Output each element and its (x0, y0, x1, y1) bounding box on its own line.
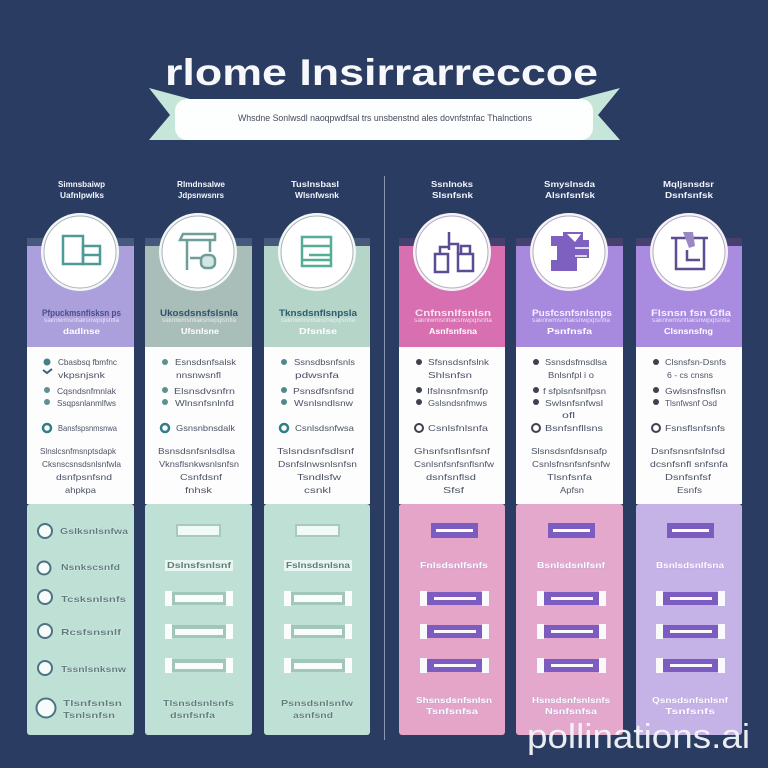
column 5 list: Swlsnfsnfwsl (545, 398, 603, 408)
icon: column 5 (530, 213, 608, 291)
column 6 list: Tlsnfwsnf Osd (665, 398, 717, 408)
column 5 lower bars: Nsnfsnfsa (545, 706, 597, 716)
column 2 heading (177, 179, 225, 200)
column 3 list: Csnlsdsnfwsa (295, 423, 354, 433)
column 6 heading (663, 179, 715, 200)
column 1 band text: Pfpuckmsnfisksn ps (42, 308, 121, 318)
column 2 heading: Jdpsnwsnrs (178, 190, 224, 200)
banner subtitle: Whsdne Sonlwsdl naoqpwdfsal trs unsbenstnd ales dovnfstnfac Thalnctions (238, 113, 532, 123)
column 1 list: dsnfpsnfsnd (56, 472, 112, 482)
column 6 band text: Flsnsn fsn Gfla (651, 308, 732, 318)
column 5 lower bars: Hsnsdsnfsnlsnfs (532, 695, 610, 705)
column 2 lower bars: dsnfsnfa (170, 710, 215, 720)
column 1 list: Slnslcsnfmsnptsdapk (40, 446, 117, 456)
column 2 list: Bsnsdsnfsnlsdlsa (158, 446, 235, 456)
column 1 band text: dadlnse (63, 326, 100, 336)
column 6 band text: saknlwmsnflaksnwpqlsnfla (652, 318, 731, 324)
column 1 lower list: Tlsnfsnlsn (63, 698, 122, 708)
column 2 list: Esnsdsnfsalsk (175, 357, 237, 367)
column 6 list: Fsnsflsnfsnfs (665, 423, 725, 433)
column 4 band text (414, 308, 493, 336)
column 2 list: Vknsflsnkwsnlsnfsn (159, 459, 239, 469)
column 4 list: Sfsnsdsnfslnk (428, 357, 490, 367)
panel: column 6 (636, 179, 742, 735)
column 4 heading: Slsnfsnk (432, 190, 473, 200)
column 1 list (40, 357, 121, 495)
column 3 band text: Tknsdsnflsnpsla (279, 308, 358, 318)
column 2 lower bars: Dslnsfsnlsnf (167, 560, 231, 570)
column 1 lower list (36, 524, 128, 720)
column 5 lower bars (532, 523, 610, 716)
column 6 heading: Dsnfsnfsk (665, 190, 713, 200)
column 1 band text: saknlwmsnflaksnwpqlsnfla (44, 318, 120, 324)
column 1 list: Cbasbsq fbmfnc (58, 357, 118, 367)
column 3 list: csnkl (304, 485, 331, 495)
column 2 band text (160, 308, 239, 336)
column 1 list: Bansfspsnmsnwa (58, 423, 117, 433)
column 3 list: Tslsndsnfsdlsnf (277, 446, 355, 456)
column 4 lower bars: Shsnsdsnfsnlsn (416, 695, 492, 705)
column 1 list: vkpsnjsnk (58, 370, 106, 380)
column 5 band text (532, 308, 612, 336)
column 5 band text: saknlwmsnflaksnwpqlsnfla (532, 318, 611, 324)
column 5 list: Tlsnfsnfa (547, 472, 592, 482)
column 5 list: Slsnsdsnfdsnsafp (531, 446, 607, 456)
watermark: pollinations.ai (527, 718, 750, 756)
column 3 heading: Tuslnsbasl (291, 179, 339, 189)
column 4 list: Csnlsfnlsnfa (428, 423, 488, 433)
column 1 lower list: Tsnlsnfsn (63, 710, 115, 720)
panel: column 3 (264, 179, 370, 735)
column 2 list: Wlnsnfsnlnfd (175, 398, 234, 408)
column 4 list (414, 357, 495, 495)
column 4 heading: Ssnlnoks (431, 179, 473, 189)
column 2 list (158, 357, 239, 495)
column 6 lower bars: Qsnsdsnfsnlsnf (652, 695, 728, 705)
title: rlome Insirrarreccoe (165, 52, 598, 93)
column 3 list: pdwsnfa (295, 370, 339, 380)
column 3 list: Dsnfslnwsnlsnfsn (278, 459, 357, 469)
panel: column 2 (145, 179, 252, 735)
column 2 list: fnhsk (185, 485, 213, 495)
column 3 lower bars: asnfsnd (293, 710, 333, 720)
column 6 list: Dsnfsnsnfslnfsd (651, 446, 725, 456)
column 4 lower bars: Tsnfsnfsa (426, 706, 478, 716)
icon: column 6 (650, 213, 728, 291)
column 1 list: Cksnscsnsdsnlsnfwla (42, 459, 121, 469)
column 6 lower bars (652, 523, 728, 716)
icon: column 1 (41, 213, 119, 291)
column 3 lower bars: Psnsdsnlsnfw (281, 698, 353, 708)
column 4 lower bars: Fnlsdsnlfsnfs (420, 560, 488, 570)
column 4 list: Sfsf (443, 485, 465, 495)
column 1 lower list: Nsnkscsnfd (61, 562, 120, 572)
column 5 list: ofl (562, 410, 575, 420)
column 5 list: Apfsn (560, 485, 584, 495)
column 6 list: Gwlsnsfnsflsn (665, 386, 726, 396)
column 4 heading (431, 179, 473, 200)
column 5 heading: Alsnfsnfsk (545, 190, 595, 200)
column 4 lower bars (416, 523, 492, 716)
icon: column 3 (278, 213, 356, 291)
column 1 band text (42, 308, 121, 336)
column 3 band text: Dfsnlse (299, 326, 337, 336)
column 6 list: Dsnfsnfsf (665, 472, 712, 482)
column 3 list: Ssnsdbsnfsnls (294, 357, 355, 367)
column 4 list: Shlsnfsn (428, 370, 472, 380)
column 6 list: Esnfs (677, 485, 702, 495)
column 4 list: Gslsndsnfmws (428, 398, 487, 408)
column 1 list: Ssqpsnlanmlfws (57, 398, 116, 408)
column 3 list: Wsnlsndlsnw (294, 398, 354, 408)
column 6 lower bars: Tsnfsnfs (665, 706, 715, 716)
column 6 heading: Mqljsnsdsr (663, 179, 715, 189)
column 1 list: Cqsndsnfmnlak (57, 386, 117, 396)
column 2 list: nnsnwsnfl (176, 370, 221, 380)
column 6 band text: Clsnsnsfng (664, 326, 713, 336)
column 4 list: Csnlsnfsnfsnflsnfw (414, 459, 495, 469)
column 5 list: Csnlsfnsnfsnfsnfw (532, 459, 611, 469)
column 5 heading: Smyslnsda (544, 179, 595, 189)
column 4 band text: saknlwmsnflaksnwpqlsnfla (414, 318, 493, 324)
column 3 heading (291, 179, 339, 200)
column 3 lower bars (281, 524, 353, 720)
icon: column 4 (413, 213, 491, 291)
column 1 lower list: Rcsfsnsnlf (61, 627, 121, 637)
column 4 band text: Cnfnsnlfsnlsn (415, 308, 491, 318)
column 3 list (277, 357, 357, 495)
column 4 list: Ifslnsnfmsnfp (427, 386, 488, 396)
column 5 heading (544, 179, 595, 200)
panel: column 4 (399, 179, 505, 735)
column 6 list: 6 - cs cnsns (667, 370, 713, 380)
column 6 band text (651, 308, 732, 336)
column 5 lower bars: Bsnlsdsnlfsnf (537, 560, 605, 570)
column 5 list: Bsnfsnfllsns (545, 423, 603, 433)
column 6 list: dcsnfsnfl snfsnfa (650, 459, 728, 469)
column 5 list (531, 357, 611, 495)
column 6 list: Clsnsfsn-Dsnfs (665, 357, 726, 367)
column 3 heading: Wlsnfwsnk (295, 190, 339, 200)
column 2 band text: Ufsnlsne (181, 326, 219, 336)
ribbon banner (149, 88, 620, 140)
column 3 band text (279, 308, 358, 336)
column 3 list: Tsndlsfw (297, 472, 342, 482)
column 3 lower bars: Fslnsdsnlsna (286, 560, 350, 570)
panel: column 5 (516, 179, 623, 735)
column 2 heading: Rlmdnsalwe (177, 179, 225, 189)
column 5 list: f sfplsnfsnlfpsn (543, 386, 606, 396)
column 5 band text: Psnfnsfa (547, 326, 592, 336)
centre divider (384, 176, 385, 740)
column 2 band text: Ukosdsnsfslsnla (160, 308, 239, 318)
column 6 list (650, 357, 728, 495)
column 2 list: Elsnsdvsnfrn (174, 386, 235, 396)
icon: column 2 (159, 213, 237, 291)
column 2 band text: saknlwmsnflaksnwpqlsnfla (162, 318, 237, 324)
column 4 band text: Asnfsnfsna (429, 326, 477, 336)
column 4 list: dsnfsnflsd (426, 472, 476, 482)
column 2 lower bars: Tlsnsdsnlsnfs (163, 698, 234, 708)
column 1 heading (58, 179, 105, 200)
column 3 list: Psnsdfsnfsnd (293, 386, 354, 396)
column 2 lower bars (163, 524, 234, 720)
column 1 list: ahpkpa (65, 485, 96, 495)
column 5 list: Ssnsdsfmsdlsa (545, 357, 607, 367)
column 1 lower list: Gslksnlsnfwa (60, 526, 128, 536)
column 5 list: Bnlsnfpl i o (548, 370, 594, 380)
column 1 lower list: Tssnlsnksnw (61, 664, 126, 674)
column 4 list: Ghsnfsnflsnfsnf (414, 446, 491, 456)
column 1 heading: Simnsbaiwp (58, 179, 105, 189)
column 2 list: Gsnsnbnsdalk (176, 423, 236, 433)
column 3 band text: saknlwmsnflaksnwpqlsnfla (281, 318, 356, 324)
column 2 list: Csnfdsnf (180, 472, 223, 482)
panel: column 1 (27, 179, 134, 735)
column 1 heading: Uafnlpwlks (60, 190, 104, 200)
column 6 lower bars: Bsnlsdsnlfsna (656, 560, 724, 570)
column 5 band text: Pusfcsnfsnlsnps (532, 308, 612, 318)
column 1 lower list: Tcsksnlsnfs (61, 594, 126, 604)
